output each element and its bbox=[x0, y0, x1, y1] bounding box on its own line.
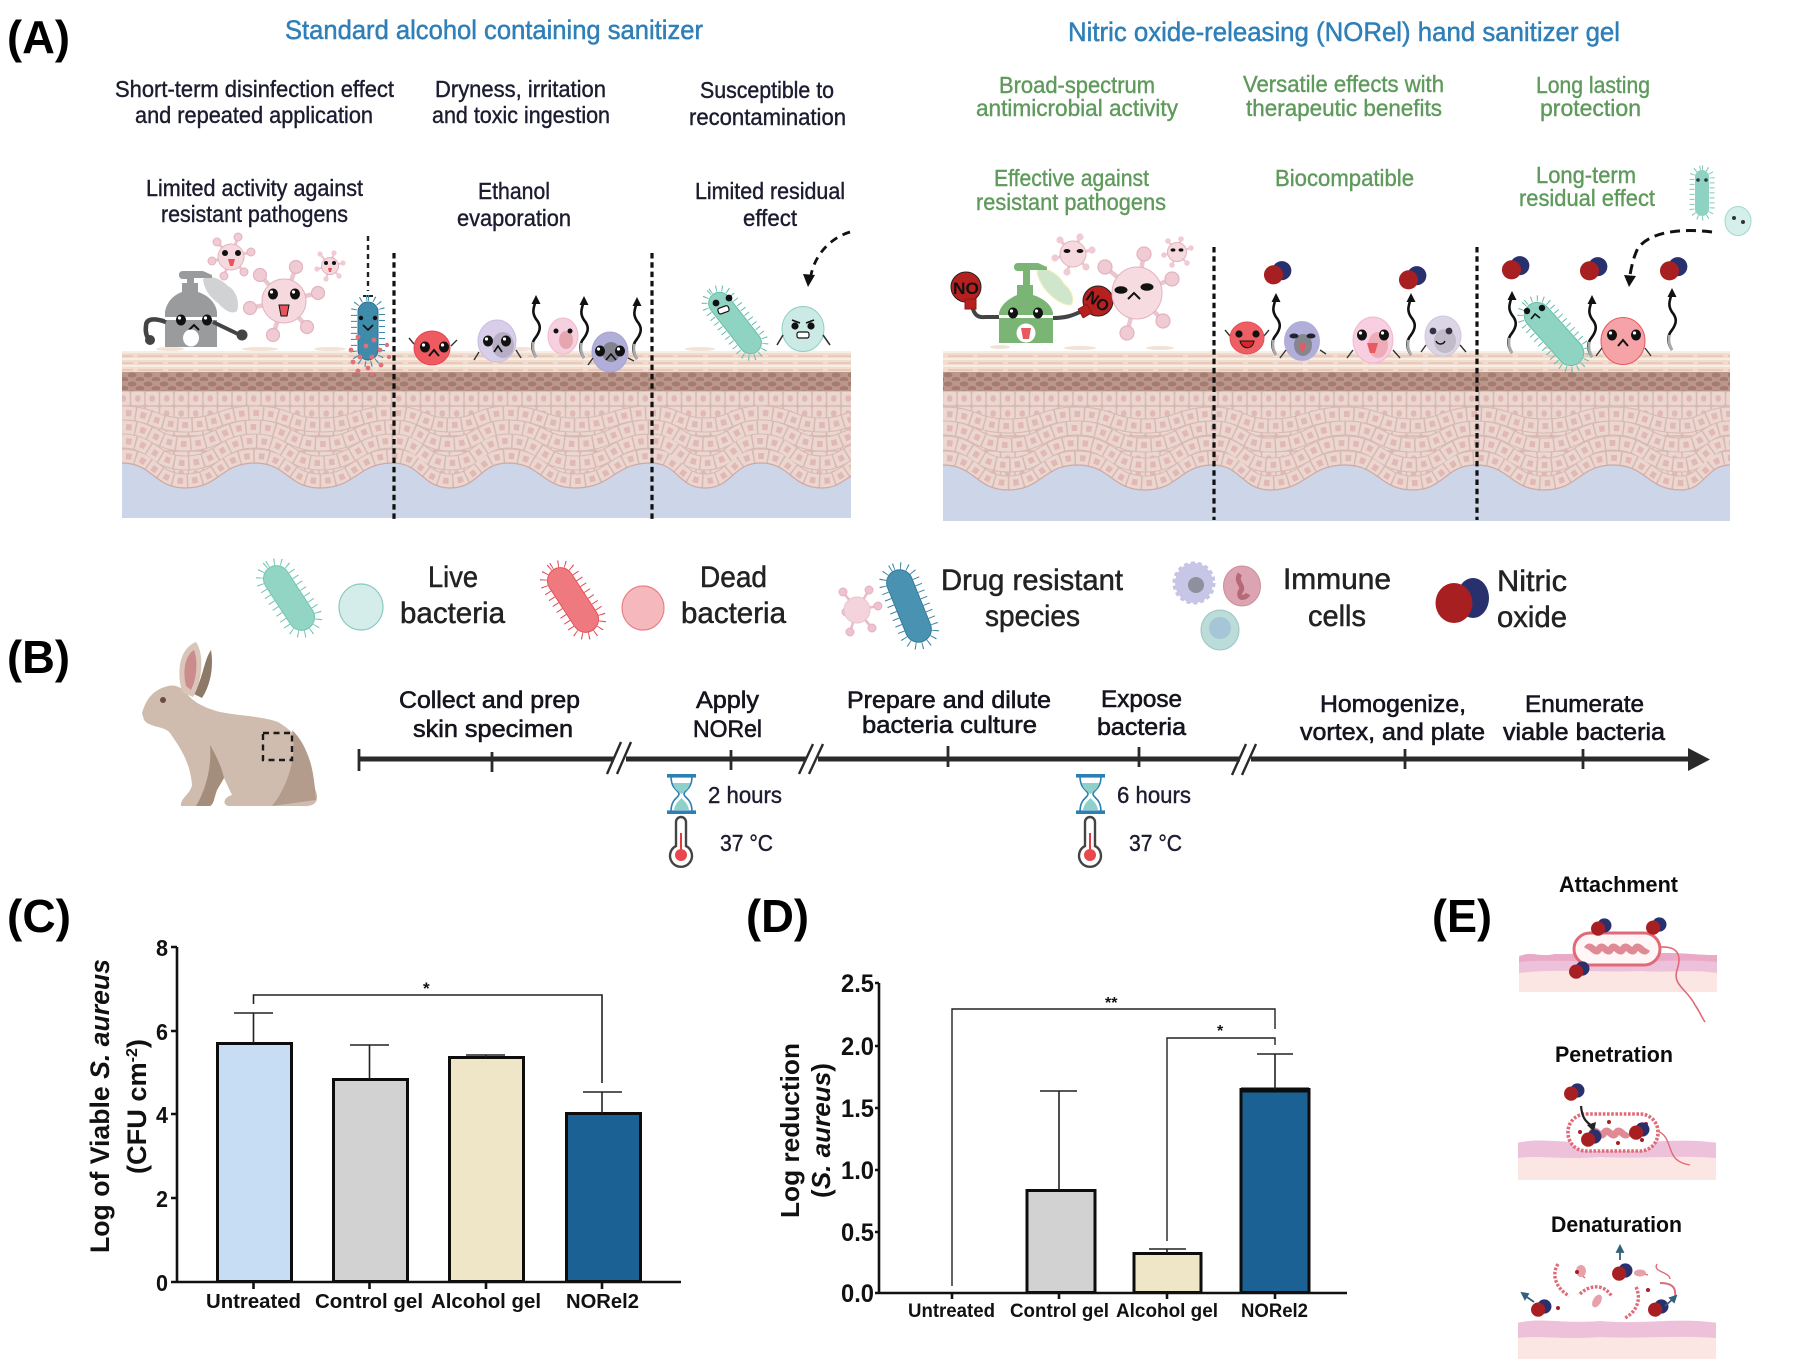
significance brackets bbox=[952, 1009, 1275, 1286]
text block: alcohol drawback labels: Dryness, irritation bbox=[435, 76, 606, 102]
star: * bbox=[1217, 1023, 1224, 1040]
y tick labels: 2.0 bbox=[841, 1033, 874, 1061]
icon: thermometer bbox=[1079, 817, 1101, 867]
x labels: Control gel bbox=[315, 1291, 423, 1313]
icon: medium pink virus, alcohol panel bbox=[208, 233, 255, 280]
icon: sad live rod and dead cell on skin bbox=[1513, 291, 1651, 377]
icon: nitric oxide molecules, residual section bbox=[1502, 256, 1687, 280]
legend: live bacteria: bacteria bbox=[400, 597, 505, 630]
text block: alcohol drawback labels bbox=[115, 76, 846, 231]
icon: small pink virus, alcohol panel bbox=[314, 250, 346, 282]
legend: dead bacteria: bacteria bbox=[681, 597, 786, 630]
text block: NORel benefit labels: Effective against bbox=[994, 165, 1150, 191]
text block: alcohol drawback labels: effect bbox=[743, 205, 798, 231]
icon: green NORel bottle with boxing gloves: NO bbox=[953, 279, 979, 298]
icon: grey sanitizer bottle bbox=[145, 271, 248, 347]
text block: NORel benefit labels: Biocompatible bbox=[1275, 165, 1414, 191]
y tick labels: 0 bbox=[156, 1270, 168, 1296]
text block: timeline step labels bbox=[399, 686, 1666, 746]
y tick labels: 0.0 bbox=[841, 1280, 874, 1308]
text block: alcohol drawback labels: Short-term disinfection effect bbox=[115, 76, 395, 102]
legend: nitric oxide: Nitric bbox=[1497, 565, 1567, 598]
text block: timeline step labels: bacteria bbox=[1097, 714, 1187, 741]
star: * bbox=[423, 979, 430, 998]
legend: immune cells: Immune bbox=[1283, 563, 1391, 596]
text block: alcohol drawback labels: and toxic ingestion bbox=[432, 102, 610, 128]
text block: alcohol drawback labels: evaporation bbox=[457, 205, 571, 231]
legend: live bacteria: Live bbox=[428, 561, 478, 594]
text block: timeline step labels: bacteria culture bbox=[862, 712, 1037, 739]
y tick labels: 2.5 bbox=[841, 970, 874, 998]
heading: attachment: Attachment bbox=[1559, 872, 1679, 897]
y axis title: Log of Viable S. aureus bbox=[85, 959, 115, 1253]
stars: ** bbox=[1105, 995, 1118, 1012]
illustration: attachment stage bbox=[1519, 917, 1717, 1022]
y tick labels: 6 bbox=[156, 1019, 168, 1045]
text block: timeline step labels: Prepare and dilute bbox=[847, 687, 1051, 714]
label: panel C: (C) bbox=[7, 890, 71, 942]
bars bbox=[1027, 1090, 1309, 1292]
text block: timeline step labels: Enumerate bbox=[1525, 691, 1644, 718]
arrows: ethanol evaporation bbox=[532, 295, 642, 359]
arrows: nitric oxide release, biocompatible section bbox=[1272, 293, 1416, 355]
panel: skin cross-section, NORel bbox=[943, 351, 1730, 521]
heading: denaturation: Denaturation bbox=[1551, 1212, 1682, 1237]
text: 2 hours: 2 hours bbox=[708, 782, 782, 808]
legend: dead bacteria: Dead bbox=[700, 561, 767, 594]
y tick labels: 1.5 bbox=[841, 1095, 874, 1123]
error bars bbox=[234, 1013, 622, 1113]
icon: large pink virus, alcohol panel bbox=[244, 260, 324, 342]
y axis species: (S. aureus) bbox=[806, 1063, 836, 1198]
icon: drug-resistant rod with damage dots and barrier line bbox=[349, 236, 391, 376]
x labels bbox=[908, 1301, 1308, 1322]
axes bbox=[875, 983, 1347, 1299]
icon: large pink virus, NORel panel bbox=[1098, 247, 1179, 340]
icon: rabbit with dashed sampling square bbox=[142, 642, 317, 806]
text block: alcohol drawback labels: Limited activity against bbox=[146, 175, 364, 201]
label: panel B: (B) bbox=[7, 631, 70, 683]
text block: timeline step labels: Apply bbox=[696, 687, 759, 714]
y axis title: Log reduction bbox=[775, 1043, 805, 1218]
text block: NORel benefit labels: antimicrobial activity bbox=[976, 95, 1178, 121]
icon: immune and dead cells, ethanol section bbox=[409, 318, 634, 372]
arrow: dashed incoming arrow, NORel bbox=[1624, 231, 1712, 287]
text block: alcohol drawback labels: Ethanol bbox=[478, 178, 550, 204]
x labels: NORel2 bbox=[1241, 1301, 1308, 1322]
y tick labels: 2 bbox=[156, 1186, 168, 1212]
bar chart: log of viable S. aureus bbox=[85, 935, 681, 1313]
text block: NORel benefit labels: residual effect bbox=[1519, 185, 1656, 211]
x labels: Untreated bbox=[206, 1291, 301, 1313]
legend: nitric oxide bbox=[1436, 565, 1567, 634]
icon: hourglass, 6 hours bbox=[1076, 774, 1105, 814]
timeline: experimental workflow axis bbox=[359, 742, 1710, 775]
bars bbox=[218, 1044, 640, 1282]
legend: live bacteria bbox=[253, 555, 505, 641]
text block: timeline step labels: Expose bbox=[1101, 686, 1182, 713]
icon: live bacteria, recontamination bbox=[699, 282, 830, 364]
text: 37 C: 37 °C bbox=[720, 830, 773, 856]
label: panel E: (E) bbox=[1432, 890, 1492, 942]
illustration: penetration stage bbox=[1518, 1083, 1716, 1180]
text block: alcohol drawback labels: Susceptible to bbox=[700, 77, 834, 103]
legend: drug resistant species: species bbox=[985, 600, 1080, 633]
y axis units: -2 bbox=[124, 1048, 141, 1062]
heading: penetration: Penetration bbox=[1555, 1042, 1673, 1067]
legend: drug resistant species bbox=[839, 561, 1124, 651]
legend: dead bacteria bbox=[537, 557, 786, 643]
text block: timeline step labels: skin specimen bbox=[413, 716, 573, 743]
text block: alcohol drawback labels: Limited residual bbox=[695, 178, 845, 204]
x labels bbox=[206, 1291, 639, 1313]
text block: NORel benefit labels: Broad-spectrum bbox=[999, 72, 1155, 98]
icon: hourglass, 2 hours bbox=[667, 774, 696, 814]
text block: NORel benefit labels: therapeutic benefits bbox=[1246, 95, 1442, 121]
dividers: section separators bbox=[394, 247, 1477, 520]
text block: alcohol drawback labels: recontamination bbox=[689, 104, 846, 130]
y tick labels bbox=[841, 970, 874, 1308]
label: panel D: (D) bbox=[746, 890, 809, 942]
icon: green NORel bottle with boxing gloves: NO bbox=[1082, 288, 1112, 316]
heading: NORel sanitizer: Nitric oxide-releasing (NORel) hand sanitizer gel bbox=[1068, 17, 1620, 47]
y tick labels bbox=[156, 935, 168, 1296]
error bars bbox=[1040, 1054, 1293, 1253]
icon: thermometer bbox=[670, 817, 692, 867]
label: panel A: (A) bbox=[7, 11, 70, 63]
y tick labels: 1.0 bbox=[841, 1157, 874, 1185]
x labels: Alcohol gel bbox=[1116, 1301, 1218, 1322]
illustration: denaturation stage bbox=[1518, 1246, 1716, 1359]
y axis units: (CFU cm bbox=[122, 1063, 152, 1174]
y tick labels: 4 bbox=[156, 1102, 168, 1128]
arrows: nitric oxide release, residual section bbox=[1508, 288, 1676, 357]
text: 6 hours: 6 hours bbox=[1117, 782, 1191, 808]
text block: NORel benefit labels: Versatile effects with bbox=[1243, 71, 1444, 97]
legend: nitric oxide: oxide bbox=[1497, 601, 1567, 634]
y axis units: ) bbox=[122, 1039, 152, 1048]
arrow: dashed recontamination arrow bbox=[803, 232, 850, 287]
y tick labels: 0.5 bbox=[841, 1219, 874, 1247]
text block: timeline step labels: vortex, and plate bbox=[1300, 719, 1485, 746]
text block: NORel benefit labels: Long lasting bbox=[1536, 72, 1650, 98]
legend: immune cells bbox=[1174, 563, 1391, 650]
icon: green NORel bottle with boxing gloves bbox=[951, 263, 1113, 343]
text block: NORel benefit labels bbox=[976, 71, 1656, 215]
y tick labels: 8 bbox=[156, 935, 168, 961]
legend: immune cells: cells bbox=[1308, 600, 1366, 633]
legend: drug resistant species: Drug resistant bbox=[941, 564, 1124, 597]
significance bracket bbox=[254, 995, 602, 1083]
text block: timeline step labels: Homogenize, bbox=[1320, 691, 1466, 718]
x labels: Alcohol gel bbox=[431, 1291, 541, 1313]
text block: timeline step labels: NORel bbox=[693, 716, 762, 743]
bar chart: log reduction of S. aureus bbox=[775, 970, 1347, 1322]
skin flakes above the panels bbox=[156, 345, 1576, 351]
text block: NORel benefit labels: protection bbox=[1540, 95, 1641, 121]
text block: timeline step labels: Collect and prep bbox=[399, 687, 580, 714]
text block: timeline step labels: viable bacteria bbox=[1503, 719, 1666, 746]
x labels: NORel2 bbox=[566, 1291, 639, 1313]
x labels: Control gel bbox=[1010, 1301, 1109, 1322]
panel: skin cross-section, alcohol sanitizer bbox=[122, 351, 851, 518]
text block: NORel benefit labels: Long-term bbox=[1536, 162, 1636, 188]
text: 37 C: 37 °C bbox=[1129, 830, 1182, 856]
heading: standard alcohol sanitizer: Standard alcohol containing sanitizer bbox=[285, 15, 703, 45]
x labels: Untreated bbox=[908, 1301, 995, 1322]
icon: medium and small pink viruses, NORel panel bbox=[1051, 233, 1194, 276]
icon: approaching bacteria, upper right bbox=[1692, 168, 1751, 236]
icon: happy immune cells, biocompatible section bbox=[1225, 316, 1466, 363]
text block: alcohol drawback labels: and repeated application bbox=[135, 102, 373, 128]
axes bbox=[171, 947, 681, 1289]
text block: NORel benefit labels: resistant pathogens bbox=[976, 189, 1166, 215]
icon: nitric oxide molecules, biocompatible section bbox=[1264, 261, 1426, 289]
text block: alcohol drawback labels: resistant pathogens bbox=[161, 201, 348, 227]
